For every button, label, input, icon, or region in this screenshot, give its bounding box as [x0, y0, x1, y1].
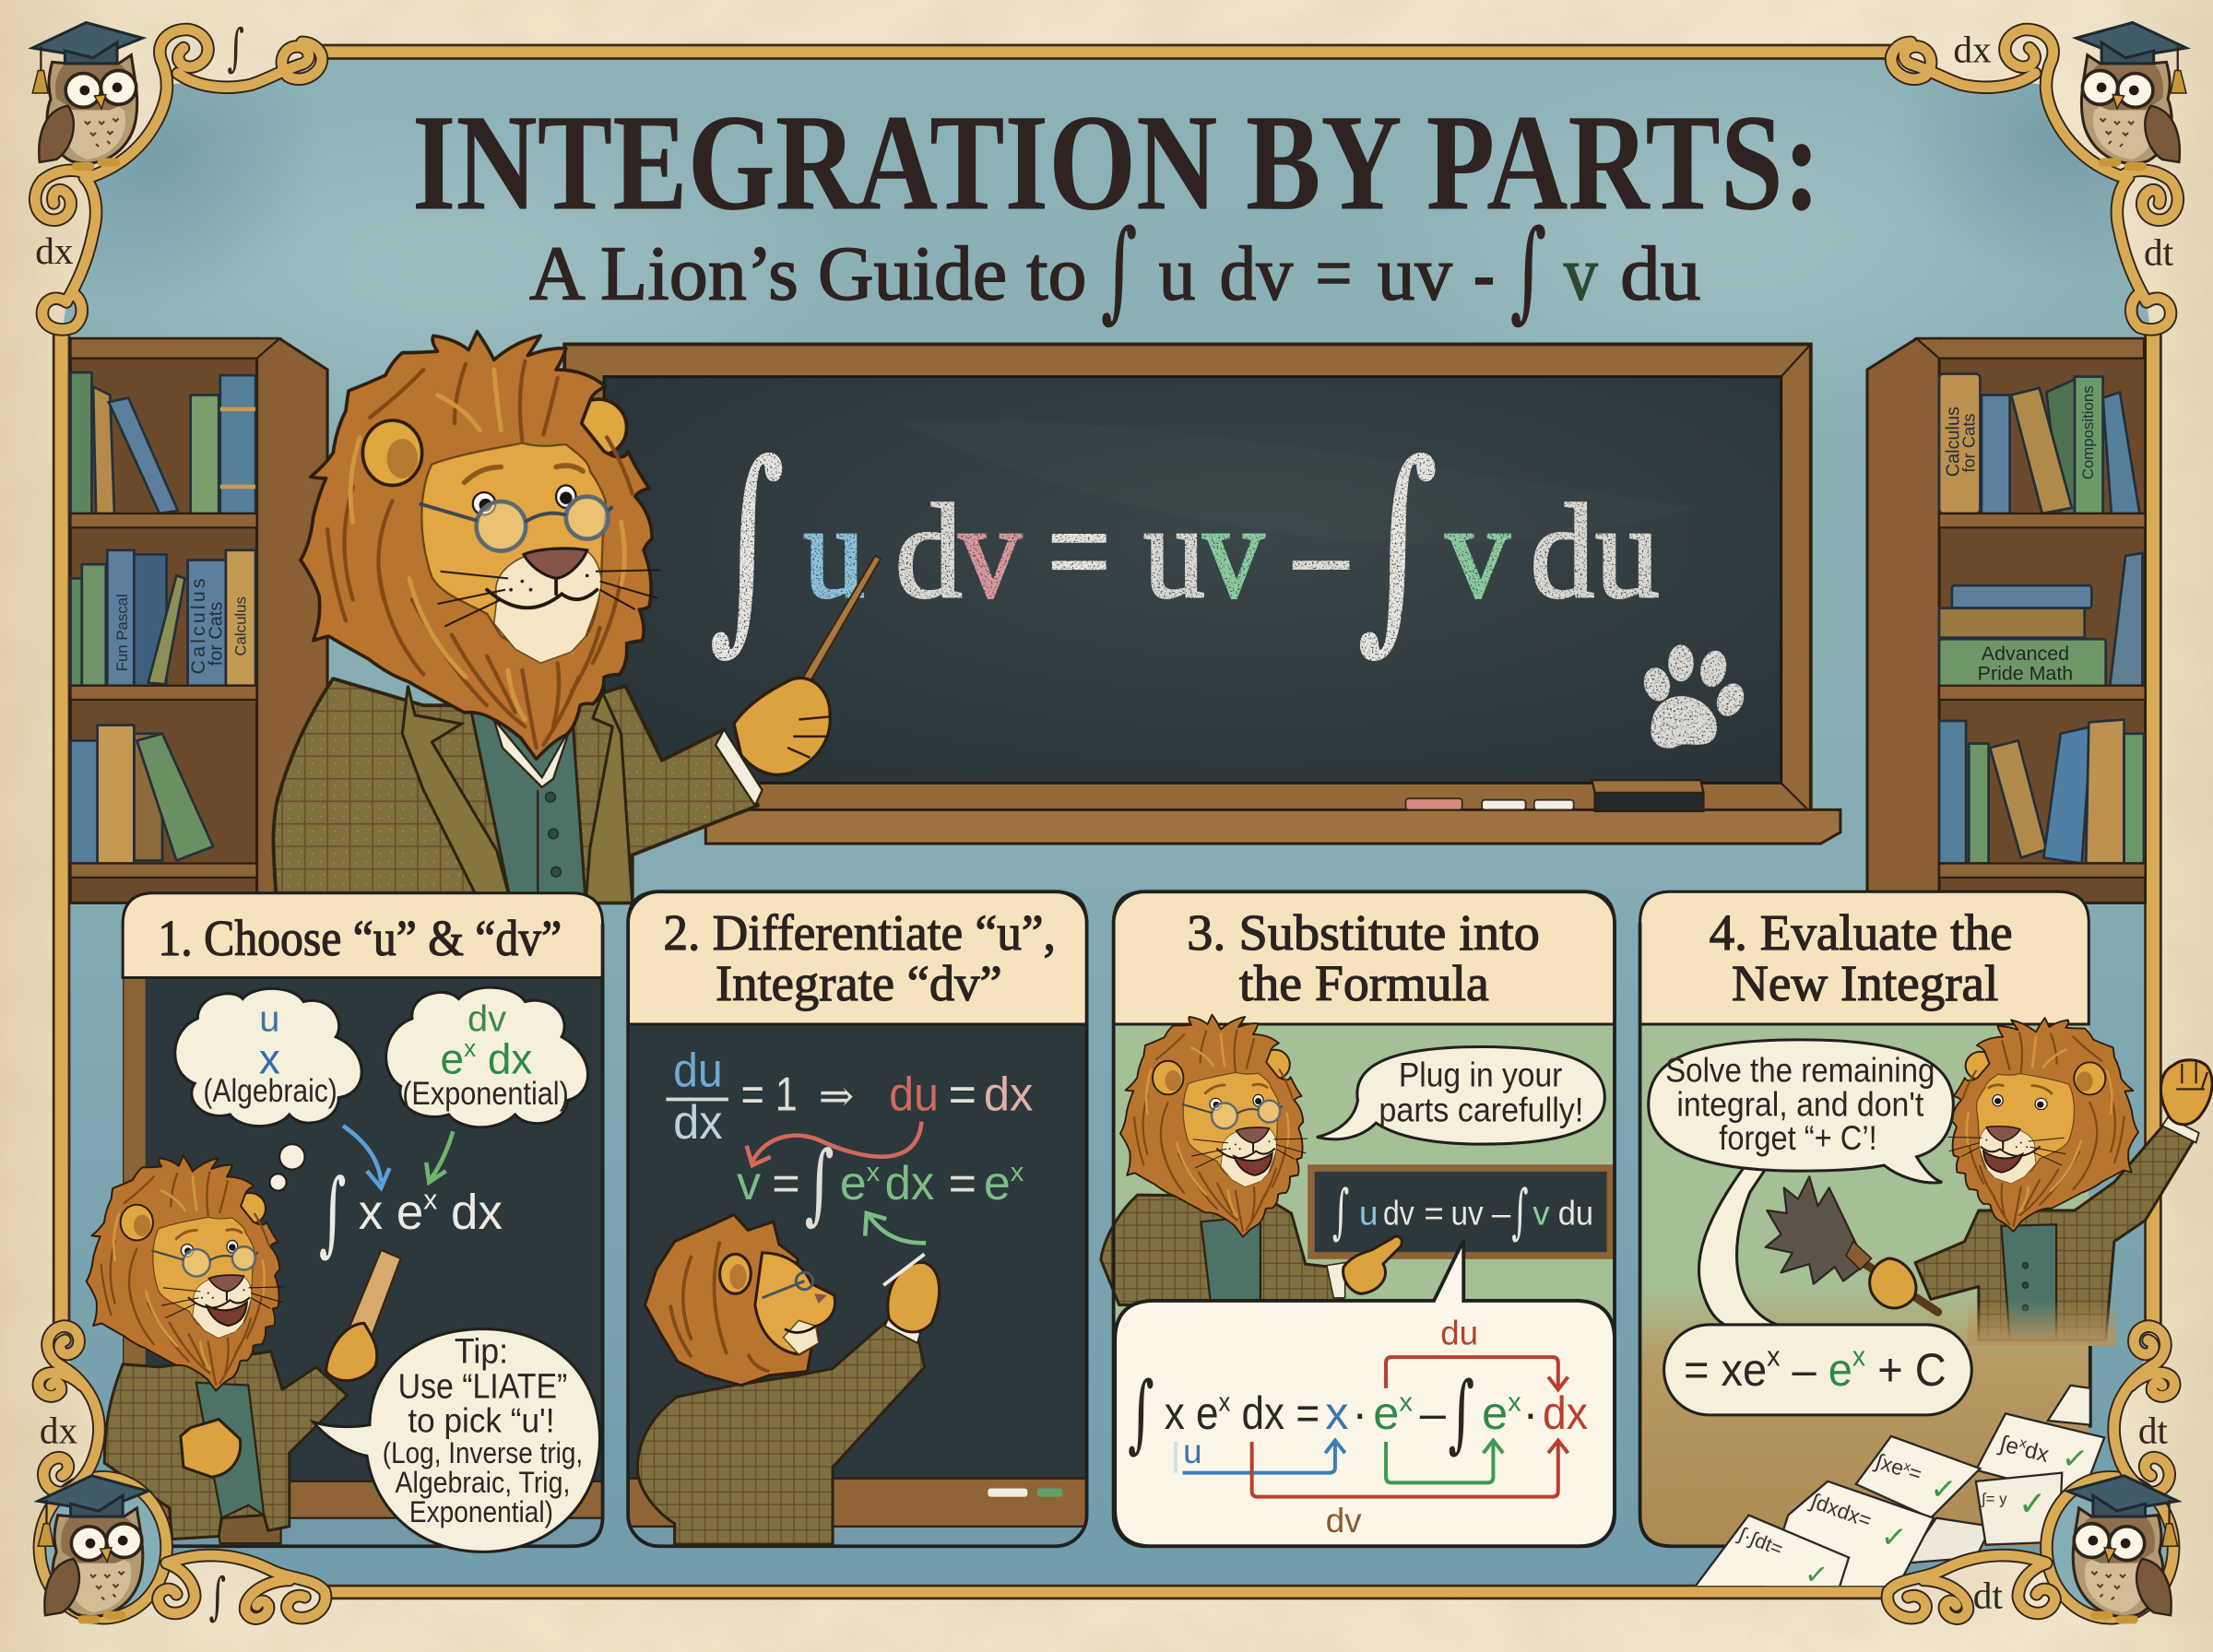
fist [181, 1419, 241, 1477]
paper: e^x dx: ∫e [1997, 1432, 2021, 1460]
left bookshelf [71, 338, 327, 903]
glasses [420, 497, 612, 551]
header [1114, 891, 1615, 1024]
jacket [104, 1351, 348, 1540]
book spine titles: Calculus [231, 596, 249, 656]
books: top shelf [1939, 374, 2139, 513]
derivative equation: du [673, 1044, 723, 1097]
panel 2: differentiate and integrate: 2. Differentiate “u”, [663, 904, 1056, 961]
corner math labels: dt [1973, 1575, 2003, 1617]
paper: under [1905, 1518, 1992, 1564]
header [628, 891, 1087, 1024]
paper: e^x dx: ✓ [2060, 1439, 2090, 1478]
tip bubble: Algebraic, Trig, [396, 1466, 570, 1499]
derivative equation: dx [673, 1096, 723, 1150]
speech bubble: Plug in your [1399, 1056, 1562, 1093]
books: top shelf [71, 372, 255, 513]
integral equation: v [737, 1157, 761, 1210]
chalk formula: = [1047, 476, 1111, 626]
subtitle with formula: A Lion’s Guide to [529, 230, 1087, 316]
right shelf spine titles: Calculus [1943, 407, 1963, 477]
shelf boards [1939, 513, 2146, 878]
worked equation: dx = [1230, 1386, 1320, 1439]
subtitle with formula [529, 207, 1700, 334]
green curved arrow [865, 1213, 926, 1243]
book spine titles: Geometries [106, 739, 124, 844]
open mouth [1983, 1151, 2022, 1173]
paper: xe^x: ✓ [1929, 1469, 1959, 1508]
writing hand and chalk [888, 1262, 940, 1332]
mini chalkboard: v [1533, 1194, 1550, 1232]
chalk formula: – [1294, 476, 1349, 626]
panel 4: evaluate the new integral: 4. Evaluate the [1710, 904, 2013, 961]
chalk formula: du [1530, 476, 1660, 626]
integral equation: ∫ [804, 1132, 834, 1234]
owl bottom-right [2067, 1476, 2178, 1620]
integral equation: = [949, 1157, 976, 1210]
cloud: u: (Algebraic) [203, 1073, 337, 1109]
chalk paw print [1640, 644, 1749, 749]
paper: dxdx: ∫dxdx= [1806, 1488, 1875, 1532]
arrow: u to x [343, 1126, 389, 1188]
derivative equation: ⇒ [819, 1070, 854, 1120]
worked equation: dx [1543, 1386, 1588, 1439]
chalk formula: ∫ [708, 416, 786, 674]
tip bubble: Exponential) [409, 1495, 553, 1528]
u label: u [1183, 1433, 1202, 1470]
owl top-right [2077, 22, 2186, 167]
answer bubble: + C [1865, 1343, 1947, 1396]
trousers [212, 1495, 281, 1543]
books: bottom shelf [71, 726, 213, 864]
top-right scroll [1891, 30, 2178, 329]
jacket fade [1968, 1301, 2117, 1346]
book spine titles: Fun Pascal [113, 594, 131, 671]
paper: xe^x: x [1902, 1458, 1912, 1474]
books: stacked shelf [1939, 553, 2142, 687]
book title: Advanced Pride Math: Advanced [1982, 643, 2069, 665]
cuff [885, 1316, 920, 1343]
answer bubble [1664, 1325, 1971, 1415]
subtitle with formula: du [1620, 230, 1700, 316]
paper: dt: ∫·∫dt= [1734, 1522, 1786, 1561]
speech bubble: forget “+ C’! [1719, 1119, 1877, 1157]
derivative equation: du [889, 1068, 939, 1121]
derivative equation: dx [984, 1068, 1033, 1121]
tip bubble: to pick “u'! [408, 1401, 555, 1439]
integral: x e [359, 1186, 424, 1240]
subtitle with formula: v [1564, 230, 1598, 316]
main chalkboard [564, 344, 1840, 844]
answer tail connector [1698, 1167, 1781, 1326]
cloud: u: u [259, 999, 279, 1040]
worked equation: · [1352, 1386, 1367, 1439]
hand on ruler [326, 1323, 377, 1381]
worked equation: x [1399, 1387, 1413, 1417]
feather duster [1766, 1176, 1938, 1312]
raised fist [2160, 1060, 2212, 1125]
paper: middle: ✓ [2018, 1484, 2047, 1524]
cloud: dv: dv [467, 999, 506, 1040]
main lion teacher [273, 332, 881, 903]
answer bubble: x [1767, 1340, 1780, 1372]
vest [196, 1383, 264, 1518]
chalk tray [705, 809, 1840, 844]
integral equation: x [1011, 1158, 1024, 1187]
integral [319, 1161, 503, 1267]
mane [645, 1215, 811, 1386]
mini chalkboard: ∫ [1511, 1178, 1529, 1246]
right shelf spine titles: for Cats [1959, 413, 1978, 473]
chalk formula: d [894, 476, 963, 626]
right shelf spine titles: Compositions [2079, 385, 2097, 479]
mini chalkboard: dv [1383, 1194, 1414, 1232]
paper: xe^x: = [1906, 1459, 1924, 1486]
lion 1 body [87, 1156, 401, 1543]
open mouth [207, 1303, 247, 1326]
integral: ∫ [319, 1161, 347, 1267]
speech bubble: integral, and don't [1676, 1085, 1923, 1123]
mini chalkboard: u [1359, 1194, 1378, 1232]
worked equation: e [1373, 1386, 1399, 1439]
chalk sticks [1405, 798, 1574, 809]
answer bubble: x [1852, 1340, 1865, 1372]
worked equation: – [1420, 1386, 1447, 1439]
corner math labels: dt [2144, 231, 2174, 274]
worked equation: x [1325, 1386, 1348, 1439]
panel 2: differentiate and integrate [628, 891, 1087, 1546]
right shelf spine titles [1943, 385, 2097, 479]
cloud: dv: e [441, 1035, 464, 1083]
top loose paper [2048, 1386, 2090, 1425]
head facing left [1947, 1018, 2138, 1232]
speech bubble [1649, 1040, 1953, 1183]
panel 2: differentiate and integrate: Integrate “dv” [716, 955, 1002, 1011]
jacket [1915, 1122, 2197, 1340]
paper: dt: ✓ [1803, 1558, 1829, 1593]
bottom-left scroll [39, 1326, 325, 1619]
integral equation: dx [885, 1157, 934, 1210]
panel 3: substitute into the formula [1101, 891, 1616, 1546]
hand [734, 678, 830, 774]
speech bubble: parts carefully! [1379, 1092, 1583, 1129]
owl top-left [32, 22, 143, 167]
books: bottom shelf [1939, 719, 2144, 864]
derivative equation: = [949, 1068, 976, 1121]
book spine titles: Calculus [187, 578, 209, 674]
books: middle shelf [71, 550, 255, 686]
paper: dxdx [1764, 1481, 1934, 1588]
right bookshelf [1867, 338, 2146, 903]
subtitle with formula: ∫ [1101, 207, 1137, 334]
lion 3 [1101, 1015, 1345, 1305]
book title: Advanced Pride Math: Pride Math [1978, 663, 2073, 685]
answer bubble: – [1780, 1343, 1828, 1396]
jacket [273, 678, 758, 903]
owl bottom-left [38, 1476, 148, 1620]
mini chalkboard: uv [1450, 1194, 1484, 1232]
formula box [1115, 1240, 1615, 1546]
speech bubble: Solve the remaining [1665, 1052, 1935, 1090]
cuff [2162, 1117, 2199, 1143]
worked equation: x [1508, 1387, 1521, 1417]
glasses [151, 1246, 258, 1277]
shelf boards [71, 513, 257, 878]
integral equation [737, 1132, 1024, 1234]
worked equation: ∫ [1128, 1363, 1154, 1462]
jacket back [637, 1319, 925, 1545]
bottom-right scroll [1888, 1326, 2174, 1619]
lapels [402, 686, 511, 903]
cloud: dv: (Exponential) [402, 1076, 569, 1112]
subtitle with formula: - [1473, 230, 1495, 316]
panel 1: choose u and dv: 1. Choose “u” & “dv” [158, 910, 562, 966]
cloud: dv: dx [476, 1035, 532, 1083]
integral equation: e [840, 1157, 867, 1210]
corner math labels: dx [40, 1410, 78, 1452]
worked equation [1128, 1363, 1588, 1462]
worked equation: x [1219, 1387, 1231, 1417]
red curved arrow [747, 1122, 921, 1165]
chalk formula: ∫ [1356, 416, 1439, 674]
cloud: dv: x [464, 1034, 476, 1062]
tip bubble: (Log, Inverse trig, [383, 1436, 583, 1469]
chalk formula: v [958, 476, 1023, 626]
lion 4 [1915, 1018, 2212, 1346]
subtitle with formula: = [1316, 230, 1352, 316]
cuff [716, 729, 763, 806]
worked equation: ∫ [1448, 1363, 1474, 1462]
panel 4: evaluate the new integral [1640, 891, 2212, 1546]
paper: dt [1694, 1516, 1849, 1593]
chalk formula: u [803, 476, 865, 626]
eraser [1592, 780, 1703, 811]
integral: x [423, 1184, 437, 1215]
mini chalkboard: ∫ [1332, 1178, 1349, 1246]
panel 3: substitute into the formula: 3. Substitute into [1187, 904, 1540, 961]
top-left scroll [35, 30, 322, 329]
worked equation: · [1523, 1386, 1538, 1439]
ruler [336, 1250, 401, 1371]
tip bubble: Tip: [455, 1331, 508, 1371]
chalk formula: u [1143, 476, 1205, 626]
answer bubble: e [1828, 1343, 1852, 1396]
subtitle with formula: dv [1219, 230, 1294, 316]
hand pointer [1343, 1236, 1402, 1293]
worked equation: x e [1165, 1386, 1226, 1439]
integral: dx [437, 1186, 503, 1240]
pile of solved papers [1694, 1386, 2104, 1593]
chalk formula: v [1445, 476, 1510, 626]
lion 2 from behind [637, 1215, 940, 1545]
cloud: u: x [259, 1035, 280, 1083]
title: INTEGRATION BY PARTS: [412, 86, 1820, 239]
panel 1: choose u and dv [87, 893, 603, 1552]
corner math labels: dt [2138, 1410, 2169, 1452]
answer bubble: = xe [1684, 1343, 1773, 1396]
chalk formula [708, 416, 1660, 674]
speech bubble [1317, 1046, 1604, 1144]
paper: e^x dx [1976, 1413, 2104, 1498]
paper: dxdx: ✓ [1879, 1517, 1909, 1556]
header [1640, 891, 2089, 1024]
chalk formula: v [1202, 476, 1265, 626]
head [301, 332, 660, 759]
integral equation: e [984, 1157, 1011, 1210]
panel 4: evaluate the new integral: New Integral [1732, 955, 1998, 1011]
mini chalkboard [1311, 1168, 1610, 1256]
dv label: dv [1326, 1502, 1362, 1540]
corner math labels: ∫ [209, 1567, 226, 1626]
shirt collar [494, 719, 570, 787]
mini chalkboard: – [1492, 1194, 1511, 1232]
tip bubble [314, 1329, 600, 1552]
corner math labels: dx [1953, 28, 1992, 70]
mini chalkboard: du [1558, 1194, 1593, 1232]
tip bubble: Use “LIATE” [398, 1367, 567, 1407]
integral equation: x [867, 1158, 881, 1187]
paper: middle [1976, 1473, 2062, 1545]
subtitle with formula: uv [1378, 230, 1453, 316]
book spine titles [106, 578, 249, 844]
book title: Advanced Pride Math [1978, 643, 2073, 685]
subtitle with formula: u [1159, 230, 1195, 316]
header [123, 893, 603, 978]
mini chalkboard: = [1424, 1194, 1444, 1232]
subtitle with formula: ∫ [1510, 207, 1546, 334]
substitution arrows [1176, 1357, 1568, 1497]
thought bubbles [269, 1144, 305, 1191]
du label: du [1440, 1314, 1478, 1351]
owl rings [40, 1477, 2173, 1618]
pointer stick [763, 556, 881, 750]
face profile [755, 1253, 835, 1354]
paper: middle: ∫= y [1981, 1490, 2007, 1507]
head [87, 1156, 284, 1391]
paper: e^x dx: x [2018, 1435, 2029, 1452]
derivative equation [666, 1044, 1033, 1150]
vest [471, 713, 586, 903]
worked equation: e [1482, 1386, 1508, 1439]
panel 3: substitute into the formula: the Formula [1239, 955, 1489, 1011]
corner math labels: dx [35, 230, 74, 272]
paper: e^x dx: dx [2022, 1438, 2052, 1468]
cloud: u [175, 988, 361, 1127]
arrow: dv to ex [426, 1131, 453, 1182]
vest [2001, 1224, 2056, 1340]
integral equation: = [772, 1157, 800, 1210]
cloud: dv [386, 987, 588, 1127]
corner math labels: ∫ [227, 18, 244, 77]
paper: xe^x: ∫xe [1873, 1449, 1907, 1481]
derivative equation: = 1 [741, 1068, 798, 1121]
paper: xe^x [1856, 1436, 1980, 1518]
book spine titles: for Cats [206, 602, 226, 666]
